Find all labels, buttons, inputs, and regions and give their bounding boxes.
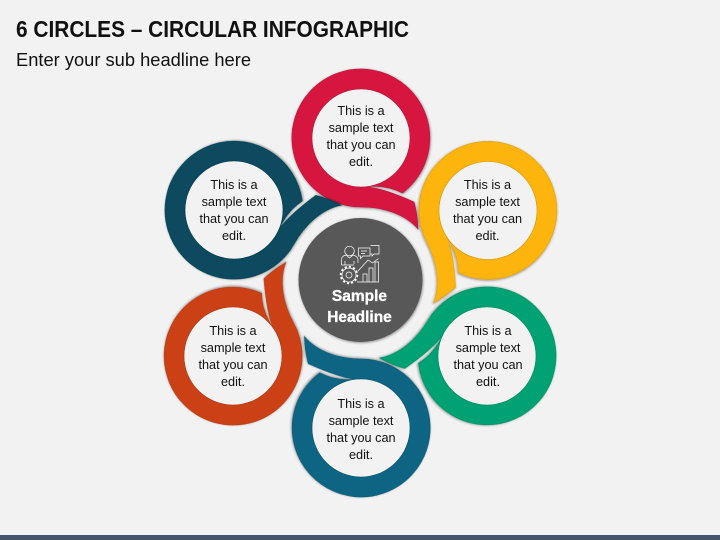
hub label: Sample	[332, 288, 387, 305]
circle: orange: sample text	[201, 341, 266, 355]
circle: orange: edit.	[221, 375, 245, 389]
center hub: Headline	[327, 309, 392, 326]
circle: teal: edit.	[349, 448, 373, 462]
circle: teal: that you can	[326, 431, 396, 445]
circle: yellow: edit.	[476, 229, 499, 243]
circle: red	[292, 69, 430, 229]
circle: red: sample text	[329, 121, 394, 135]
circle: orange: that you can	[198, 358, 268, 372]
circle: red: that you can	[326, 138, 396, 152]
circle: red: edit.	[349, 155, 373, 169]
circle: yellow: that you can	[453, 212, 522, 226]
circle: yellow: sample text	[455, 195, 520, 209]
circle: green: edit.	[476, 375, 500, 389]
circle: teal: This is a	[337, 397, 386, 411]
subtitle: Enter your sub headline here	[16, 50, 251, 70]
circle: green: sample text	[456, 341, 521, 355]
footer bar	[0, 535, 720, 540]
circle: navy: that you can	[199, 212, 269, 226]
circle: yellow	[375, 117, 581, 313]
circle: navy	[140, 116, 347, 315]
circle: navy: This is a	[210, 178, 259, 192]
circle: teal	[292, 337, 431, 497]
circle: yellow: This is a	[464, 178, 512, 192]
icon: person with chart and gear	[341, 246, 379, 283]
circle: orange: This is a	[209, 324, 258, 338]
circle: teal: sample text	[329, 414, 394, 428]
circle: green	[374, 250, 582, 451]
circle: navy: sample text	[202, 195, 267, 209]
circle: red: This is a	[337, 104, 386, 118]
circle: green: that you can	[453, 358, 523, 372]
circle: orange	[140, 252, 346, 450]
title: 6 CIRCLES – CIRCULAR INFOGRAPHIC	[16, 16, 409, 42]
circle: navy: edit.	[222, 229, 246, 243]
circle: green: This is a	[464, 324, 513, 338]
center hub	[298, 218, 422, 342]
